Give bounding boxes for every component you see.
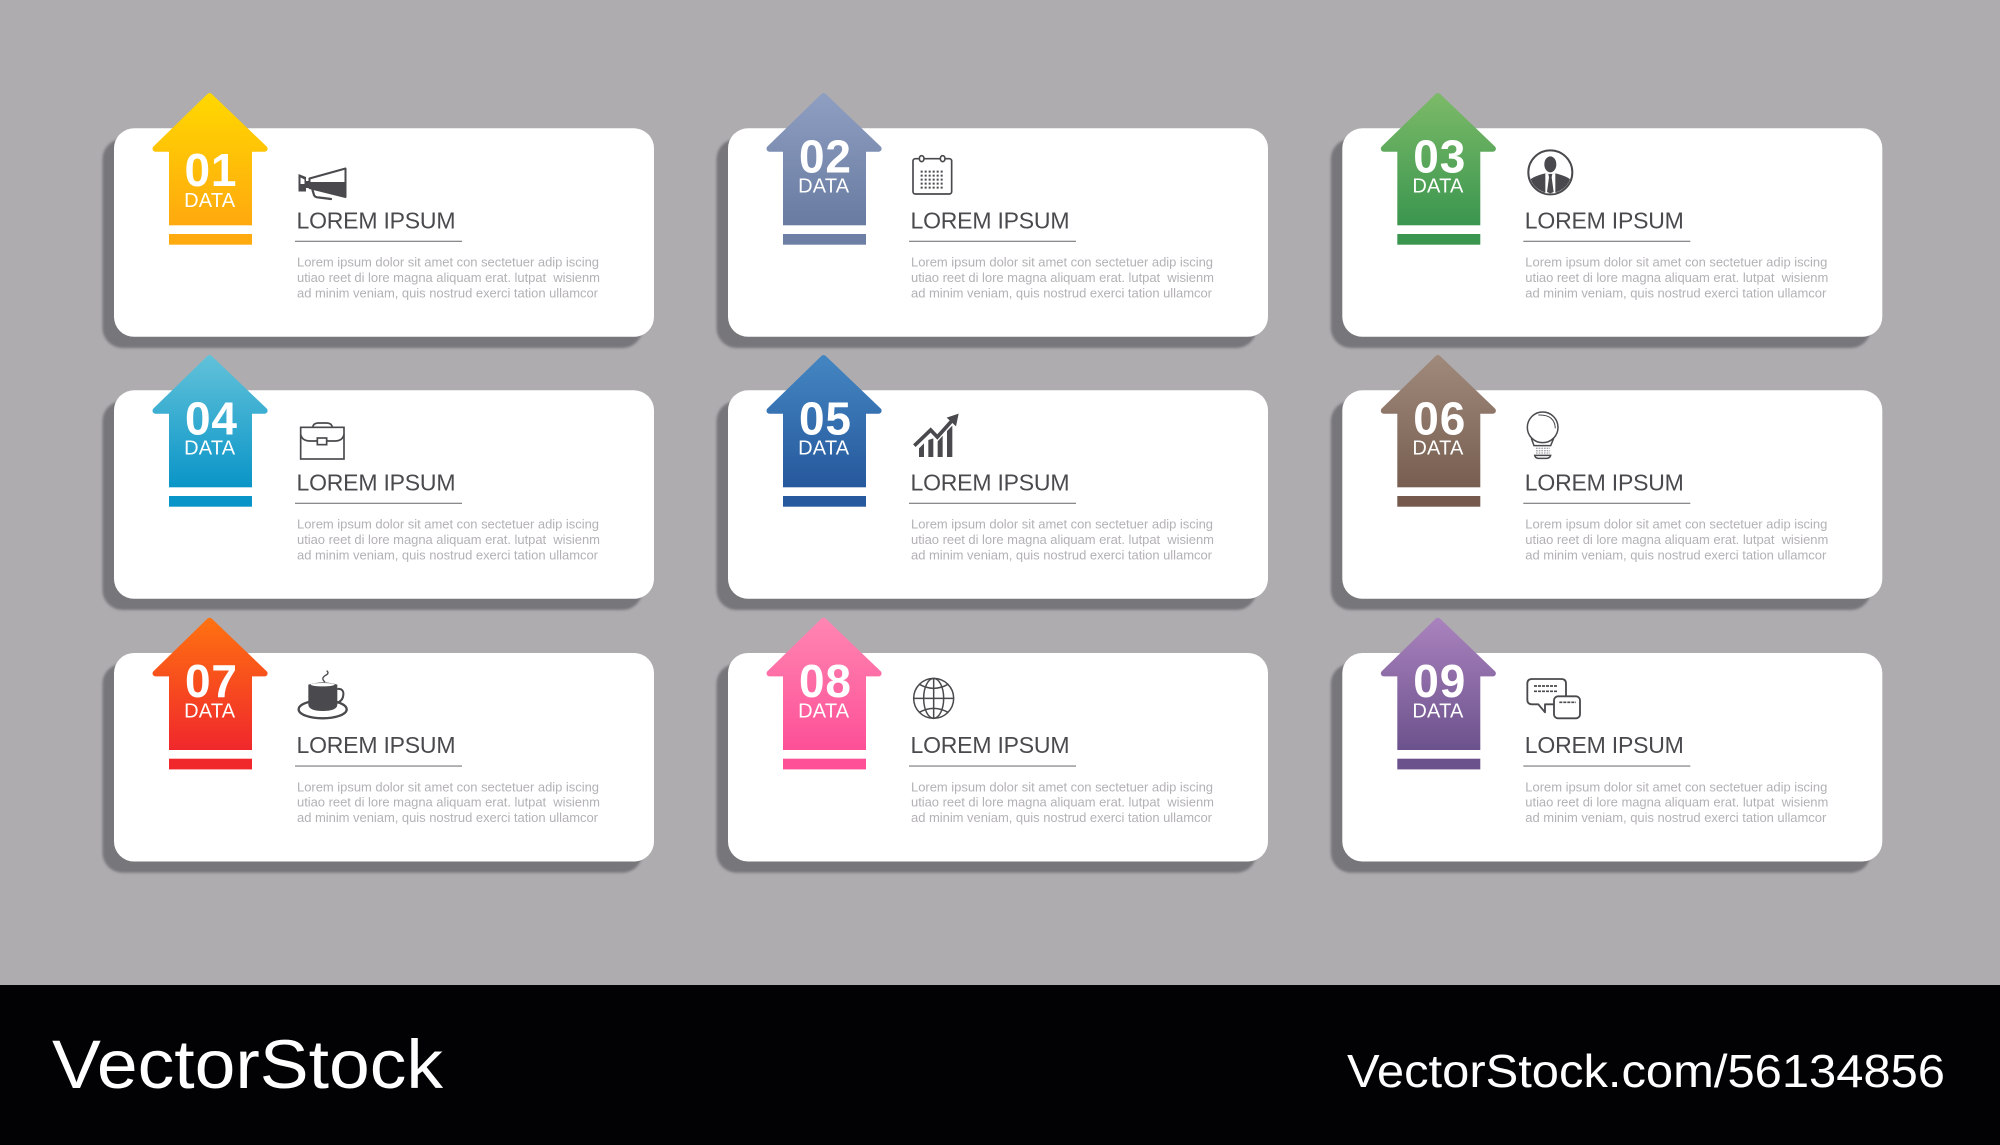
arrow badge 04 — [156, 358, 265, 507]
heading: LOREM IPSUM — [296, 469, 456, 495]
arrow badge 02 — [770, 96, 879, 245]
arrow badge 03: DATA — [1412, 176, 1464, 198]
body text: utiao reet di lore magna aliquam erat. lutpat wisienm — [911, 532, 1214, 547]
underline — [295, 765, 462, 767]
underline — [295, 503, 462, 504]
body text — [1525, 255, 1828, 300]
card shadow — [716, 139, 1256, 348]
arrow badge 09: 09 — [1413, 655, 1465, 707]
underline — [909, 503, 1076, 504]
panel: card 06 — [1331, 358, 1882, 610]
card body — [728, 653, 1268, 862]
icon: light bulb — [1527, 412, 1558, 458]
card body — [728, 128, 1268, 337]
body text: Lorem ipsum dolor sit amet con sectetuer adip iscing — [1525, 779, 1827, 794]
underline — [295, 241, 462, 242]
card shadow — [1331, 664, 1871, 873]
underline — [909, 241, 1076, 242]
heading: LOREM IPSUM — [910, 732, 1070, 758]
heading: LOREM IPSUM — [1525, 469, 1684, 495]
body text: Lorem ipsum dolor sit amet con sectetuer adip iscing — [297, 517, 599, 532]
arrow badge 03: 03 — [1413, 130, 1465, 182]
panel: card 03 — [1331, 96, 1882, 348]
body text: ad minim veniam, quis nostrud exerci tation ullamcor — [911, 285, 1213, 300]
icon: megaphone — [298, 168, 346, 199]
card shadow — [716, 664, 1256, 873]
body text: utiao reet di lore magna aliquam erat. lutpat wisienm — [297, 270, 600, 285]
arrow badge 08: 08 — [799, 655, 851, 707]
panel: card 07 — [102, 621, 654, 873]
body text: ad minim veniam, quis nostrud exerci tation ullamcor — [911, 810, 1213, 825]
body text: ad minim veniam, quis nostrud exerci tation ullamcor — [911, 547, 1213, 562]
arrow badge 03 — [1384, 96, 1493, 245]
body text — [1525, 517, 1828, 562]
card body — [114, 653, 654, 862]
panel: card 08 — [716, 621, 1268, 873]
body text — [911, 517, 1214, 562]
footer image url: VectorStock.com/56134856 — [1347, 1045, 1945, 1097]
arrow badge 09 — [1384, 621, 1493, 769]
icon: globe — [914, 678, 954, 718]
card body — [1342, 390, 1882, 599]
arrow badge 06 — [1384, 358, 1493, 507]
arrow badge 08 — [770, 621, 879, 769]
body text: Lorem ipsum dolor sit amet con sectetuer adip iscing — [911, 779, 1213, 794]
arrow badge 05: DATA — [798, 438, 850, 460]
body text: Lorem ipsum dolor sit amet con sectetuer adip iscing — [911, 517, 1213, 532]
heading: LOREM IPSUM — [1525, 207, 1684, 233]
body text: Lorem ipsum dolor sit amet con sectetuer adip iscing — [297, 779, 599, 794]
body text: utiao reet di lore magna aliquam erat. lutpat wisienm — [1525, 532, 1828, 547]
icon: calendar — [913, 156, 952, 194]
arrow badge 02: 02 — [799, 130, 851, 182]
icon: coffee cup — [299, 671, 347, 718]
body text: ad minim veniam, quis nostrud exerci tation ullamcor — [297, 285, 599, 300]
card body — [1342, 653, 1882, 862]
body text: utiao reet di lore magna aliquam erat. lutpat wisienm — [1525, 270, 1828, 285]
card body — [114, 390, 654, 599]
body text: utiao reet di lore magna aliquam erat. lutpat wisienm — [297, 795, 600, 810]
body text — [297, 255, 600, 300]
arrow badge 06: DATA — [1412, 438, 1464, 460]
body text: Lorem ipsum dolor sit amet con sectetuer adip iscing — [1525, 255, 1827, 270]
arrow badge 01 — [156, 96, 265, 245]
arrow badge 05 — [770, 358, 879, 507]
body text — [1525, 779, 1828, 825]
footer band — [0, 985, 2000, 1145]
body text: Lorem ipsum dolor sit amet con sectetuer adip iscing — [1525, 517, 1827, 532]
icon: chat bubbles — [1527, 679, 1580, 718]
arrow badge 04: DATA — [184, 438, 236, 460]
panel: card 05 — [716, 358, 1268, 610]
card shadow — [102, 139, 642, 348]
panel: card 04 — [102, 358, 654, 610]
panel: card 09 — [1331, 621, 1882, 873]
underline — [1523, 765, 1690, 767]
underline — [909, 765, 1076, 767]
body text: Lorem ipsum dolor sit amet con sectetuer adip iscing — [297, 255, 599, 270]
card body — [1342, 128, 1882, 337]
arrow badge 01: DATA — [184, 190, 236, 212]
arrow badge 01: 01 — [184, 144, 236, 196]
underline — [1523, 503, 1690, 504]
icon: briefcase — [301, 423, 344, 459]
arrow badge 08: DATA — [798, 700, 850, 722]
body text: utiao reet di lore magna aliquam erat. lutpat wisienm — [911, 795, 1214, 810]
heading: LOREM IPSUM — [296, 732, 456, 758]
panel: card 02 — [716, 96, 1268, 348]
card shadow — [1331, 401, 1871, 610]
heading: LOREM IPSUM — [1525, 732, 1684, 758]
heading: LOREM IPSUM — [910, 469, 1070, 495]
icon: rising bar chart — [914, 414, 959, 457]
body text: ad minim veniam, quis nostrud exerci tation ullamcor — [1525, 810, 1827, 825]
arrow badge 02: DATA — [798, 176, 850, 198]
arrow badge 07: 07 — [185, 655, 237, 707]
body text — [911, 779, 1214, 825]
underline — [1523, 241, 1690, 242]
heading: LOREM IPSUM — [910, 207, 1070, 233]
body text: ad minim veniam, quis nostrud exerci tation ullamcor — [297, 547, 599, 562]
body text — [297, 517, 600, 562]
card shadow — [102, 401, 642, 610]
arrow badge 05: 05 — [799, 392, 851, 444]
heading: LOREM IPSUM — [296, 207, 456, 233]
footer logo wordmark: VectorStock — [52, 1026, 444, 1103]
body text: utiao reet di lore magna aliquam erat. lutpat wisienm — [1525, 795, 1828, 810]
body text: Lorem ipsum dolor sit amet con sectetuer adip iscing — [911, 255, 1213, 270]
arrow badge 07: DATA — [184, 700, 236, 722]
body text: utiao reet di lore magna aliquam erat. lutpat wisienm — [297, 532, 600, 547]
card body — [114, 128, 654, 337]
icon: business person — [1528, 150, 1572, 194]
arrow badge 07 — [156, 621, 265, 769]
card shadow — [716, 401, 1256, 610]
arrow badge 04: 04 — [185, 392, 237, 444]
body text — [297, 779, 600, 825]
card shadow — [102, 664, 642, 873]
card shadow — [1331, 139, 1871, 348]
body text: ad minim veniam, quis nostrud exerci tation ullamcor — [297, 810, 599, 825]
card body — [728, 390, 1268, 599]
panel: card 01 — [102, 96, 654, 348]
arrow badge 06: 06 — [1413, 392, 1465, 444]
body text: ad minim veniam, quis nostrud exerci tation ullamcor — [1525, 285, 1827, 300]
body text: ad minim veniam, quis nostrud exerci tation ullamcor — [1525, 547, 1827, 562]
arrow badge 09: DATA — [1412, 700, 1464, 722]
body text — [911, 255, 1214, 300]
body text: utiao reet di lore magna aliquam erat. lutpat wisienm — [911, 270, 1214, 285]
